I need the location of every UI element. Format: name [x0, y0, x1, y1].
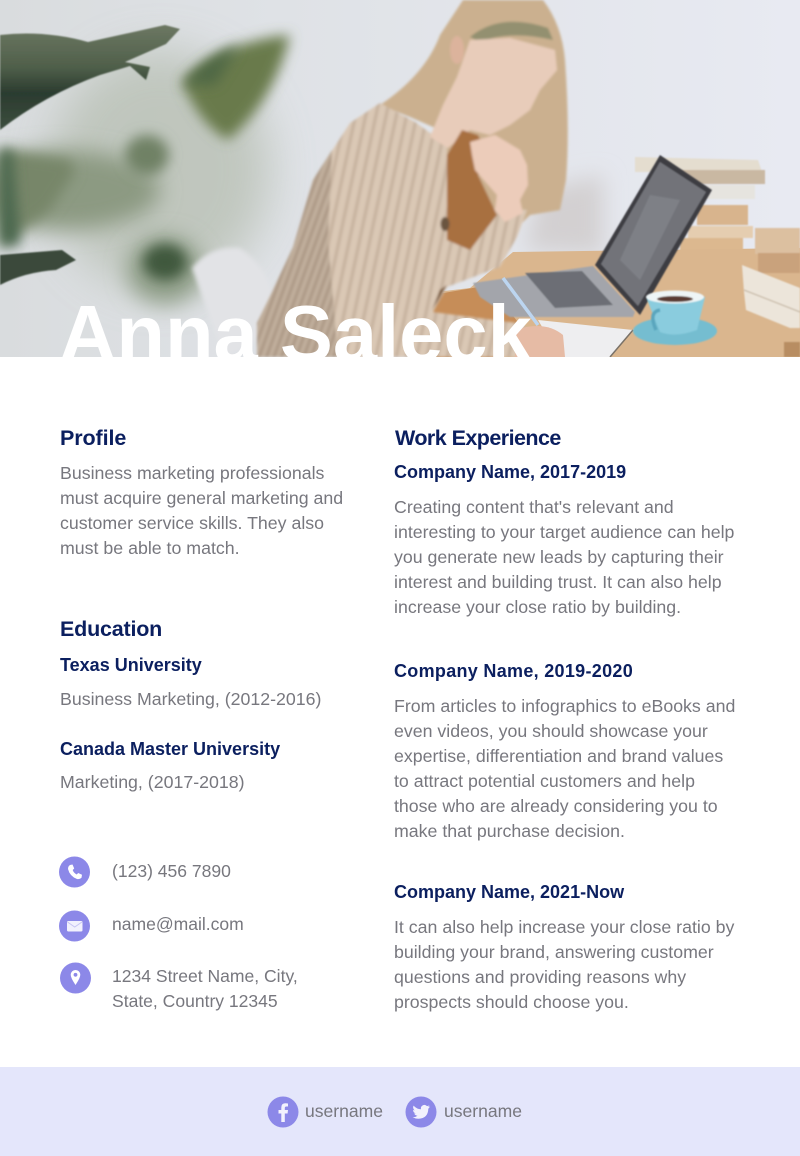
job 1 description: Creating content that's relevant and	[394, 497, 674, 517]
heading: Education: Education	[60, 617, 162, 641]
degree: Business Marketing, (2012-2016)	[60, 689, 321, 709]
button	[440, 217, 450, 231]
job 3 title: Company Name, 2021-Now	[394, 882, 624, 902]
profile text: must be able to match.	[60, 538, 240, 558]
degree: Marketing, (2017-2018)	[60, 772, 245, 792]
street address	[112, 966, 298, 1011]
wall shadow	[525, 175, 603, 255]
job 2 description: expertise, differentiation and brand values	[394, 746, 723, 766]
icon: twitter	[406, 1096, 436, 1128]
woman	[257, 0, 568, 357]
job 1 description: you generate new leads by capturing their	[394, 547, 724, 567]
education entry: Texas University	[60, 655, 321, 709]
heading: Work Experience: Work Experience	[395, 426, 561, 450]
phone number: (123) 456 7890	[112, 861, 231, 881]
hair	[380, 0, 568, 255]
book stack right	[742, 228, 800, 357]
job 2 description: make that purchase decision.	[394, 821, 625, 841]
icon: map pin	[60, 962, 91, 994]
coffee cup and saucer	[633, 290, 717, 345]
icon: phone	[59, 856, 90, 888]
job 1 description: interesting to your target audience can help	[394, 522, 734, 542]
school name: Canada Master University	[60, 739, 280, 759]
job 2 description	[394, 696, 735, 841]
school name: Texas University	[60, 655, 202, 675]
contact: phone	[59, 856, 231, 888]
sweater	[257, 103, 533, 357]
job 3 description: It can also help increase your close ratio by	[394, 917, 734, 937]
job 1 description: interest and building trust. It can also help	[394, 572, 722, 592]
job 3 description: prospects should choose you.	[394, 992, 629, 1012]
job 2 title: Company Name, 2019-2020	[394, 661, 633, 681]
hand	[470, 135, 528, 222]
contact: email	[59, 910, 244, 942]
laptop	[473, 155, 712, 317]
job 2 description: From articles to infographics to eBooks and	[394, 696, 735, 716]
email address: name@mail.com	[112, 914, 244, 934]
icon: envelope	[59, 910, 90, 942]
icon: facebook	[268, 1096, 298, 1128]
neck and face	[430, 38, 557, 148]
job 1 title: Company Name, 2017-2019	[394, 462, 626, 482]
books behind laptop	[635, 157, 765, 254]
profile text	[60, 463, 343, 558]
job 1 description	[394, 497, 734, 617]
street address: State, Country 12345	[112, 991, 278, 1011]
job 3 description: building your brand, answering customer	[394, 942, 714, 962]
street address: 1234 Street Name, City,	[112, 966, 298, 986]
sharp dark leaves	[0, 25, 180, 285]
profile text: customer service skills. They also	[60, 513, 324, 533]
education entry: Canada Master University	[60, 739, 280, 792]
job 3 description: questions and providing reasons why	[394, 967, 686, 987]
notebook and pen	[503, 278, 633, 357]
contact: address	[60, 962, 298, 1011]
job 2 description: those who are already considering you to	[394, 796, 718, 816]
profile text: must acquire general marketing and	[60, 488, 343, 508]
heading: Profile: Profile	[60, 426, 126, 450]
auburn hair	[447, 130, 497, 250]
footer band	[0, 1067, 800, 1156]
header photo: woman working at desk	[0, 0, 800, 357]
facebook username: username	[305, 1101, 383, 1121]
profile text: Business marketing professionals	[60, 463, 324, 483]
desk	[436, 248, 800, 357]
job 1 description: increase your close ratio by building.	[394, 597, 681, 617]
twitter username: username	[444, 1101, 522, 1121]
job 3 description	[394, 917, 734, 1012]
hand writing	[515, 326, 565, 357]
chair	[192, 248, 272, 357]
job 2 description: to attract potential customers and help	[394, 771, 695, 791]
blurred plant background	[0, 35, 290, 304]
job 2 description: even videos, you should showcase your	[394, 721, 708, 741]
